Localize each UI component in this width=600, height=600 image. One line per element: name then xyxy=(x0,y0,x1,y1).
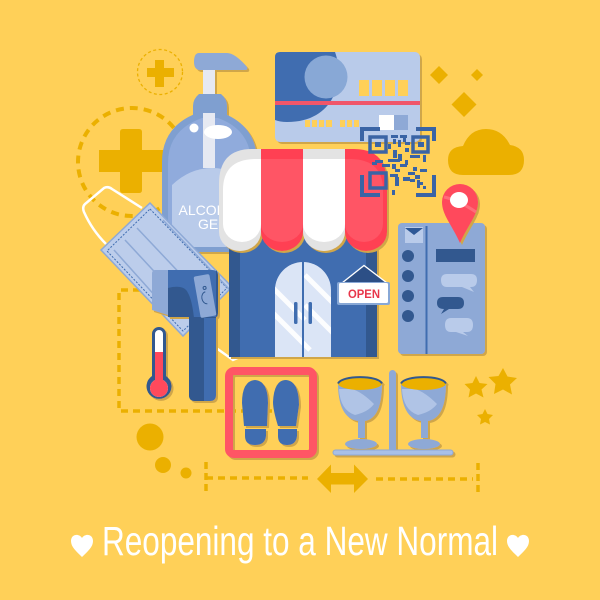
infographic xyxy=(71,48,529,564)
store awning xyxy=(219,149,387,251)
large dashed circle with plus xyxy=(78,108,186,216)
open sign: OPEN xyxy=(348,287,380,301)
cloud xyxy=(448,129,524,175)
open sign xyxy=(337,266,390,305)
diamonds xyxy=(430,66,483,117)
credit card xyxy=(275,52,420,142)
alcohol gel bottle: ALCOHOL xyxy=(179,202,246,218)
dots xyxy=(136,424,192,478)
heart right xyxy=(507,535,529,557)
right goblet xyxy=(401,377,446,449)
double arrow xyxy=(317,464,368,493)
QR code xyxy=(362,129,434,195)
ear loop left xyxy=(83,187,142,244)
location pin xyxy=(442,184,478,243)
alcohol gel bottle xyxy=(162,53,257,252)
ear loop right xyxy=(212,345,242,360)
heart left xyxy=(71,535,93,557)
footprint floor sign xyxy=(229,371,313,454)
divider stand with goblets xyxy=(333,370,453,455)
store building xyxy=(229,235,377,357)
infrared thermometer gun xyxy=(152,270,218,401)
store door xyxy=(275,262,331,357)
alcohol gel bottle: GEL xyxy=(198,216,226,232)
envelope xyxy=(405,227,423,243)
bottom dashed lines xyxy=(206,462,478,495)
face mask xyxy=(101,203,232,336)
dashed route left xyxy=(119,290,276,411)
small dashed circle with plus xyxy=(138,50,182,94)
chat menu panel xyxy=(398,223,485,354)
left goblet xyxy=(338,377,382,449)
screen xyxy=(193,274,217,318)
stars xyxy=(464,368,517,424)
thermometer xyxy=(146,327,172,399)
